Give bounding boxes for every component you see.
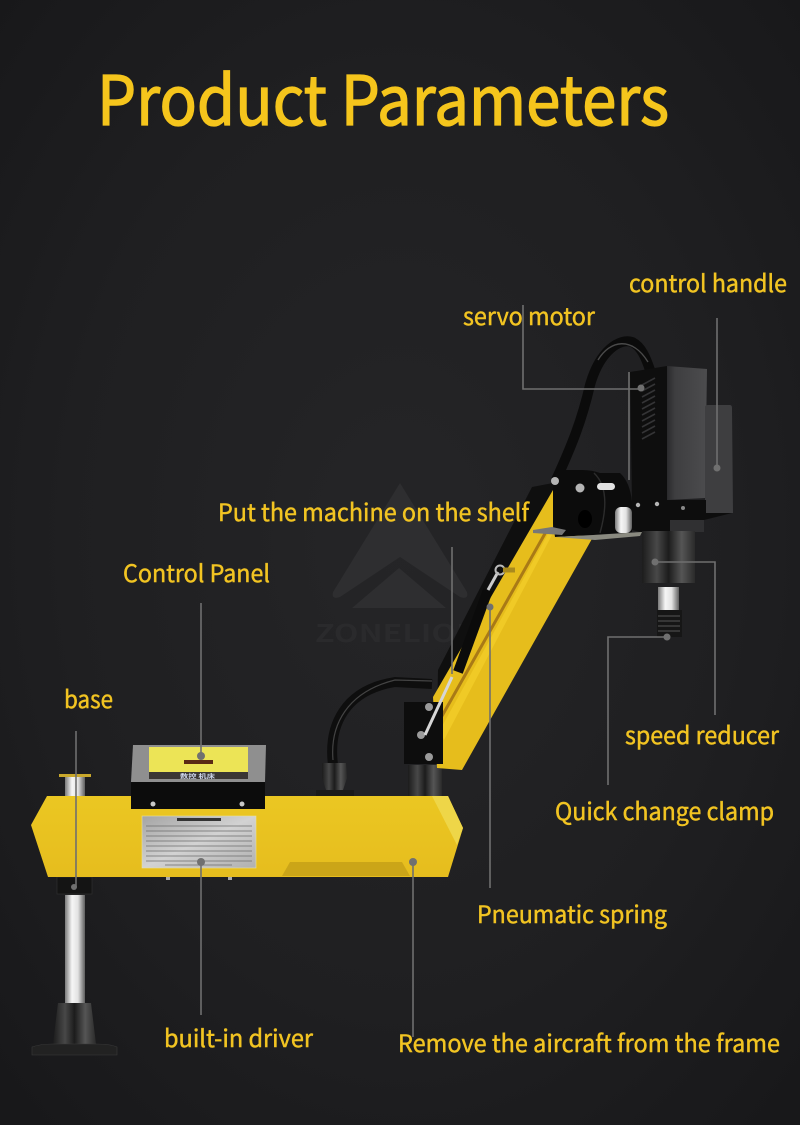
machine: tapping arm <box>31 341 733 1055</box>
yellow arm <box>433 490 593 770</box>
cable to base <box>332 682 432 765</box>
callout: control handle: control handle <box>629 264 787 299</box>
watermark logo: ZONELION <box>315 614 480 649</box>
motor mount <box>632 500 732 532</box>
control handle <box>705 405 733 513</box>
black arm side <box>437 483 556 720</box>
cable connector <box>316 763 354 796</box>
nameplate <box>142 816 256 868</box>
callout: pneumatic spring: Pneumatic spring <box>477 895 667 930</box>
watermark logo <box>315 483 480 649</box>
callout: control handle <box>629 264 787 472</box>
callout: base <box>64 680 113 890</box>
upper cable <box>556 341 650 480</box>
pivot joint <box>533 470 642 540</box>
callout: quick change clamp: Quick change clamp <box>555 792 774 827</box>
yellow base <box>31 796 463 877</box>
control panel: 数控 机床 <box>180 772 215 780</box>
control panel <box>131 745 266 809</box>
callout: control panel <box>123 554 270 760</box>
callout: control panel: Control Panel <box>123 554 270 589</box>
callout: servo motor: servo motor <box>463 297 596 332</box>
quick change clamp <box>657 587 682 637</box>
callout: pneumatic spring <box>477 604 667 930</box>
callout: remove the aircraft from the frame: Remove the aircraft from the frame <box>398 1024 780 1059</box>
arm column <box>408 765 442 796</box>
callout: quick change clamp <box>555 634 774 827</box>
callout: servo motor <box>463 297 644 480</box>
callout: remove the aircraft from the frame <box>398 858 780 1059</box>
servo motor <box>630 366 707 502</box>
callout: built-in driver <box>164 858 314 1054</box>
callout: put the machine on the shelf: Put the machine on the shelf <box>218 493 530 528</box>
callout: speed reducer: speed reducer <box>625 716 780 751</box>
title: Product Parameters <box>97 46 669 145</box>
speed reducer <box>642 531 695 583</box>
lower arm block <box>404 702 443 764</box>
support pole <box>32 774 117 1055</box>
callout: built-in driver: built-in driver <box>164 1019 314 1054</box>
callout: speed reducer <box>625 558 780 751</box>
pneumatic spring <box>425 566 515 735</box>
callout: base: base <box>64 680 113 715</box>
